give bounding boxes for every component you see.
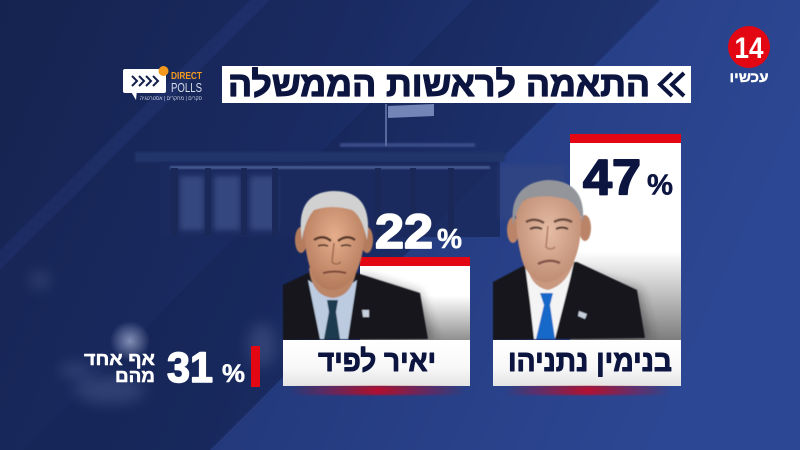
value: 22 percent: 22 (375, 206, 433, 259)
value: 47 percent: 47 (583, 150, 641, 206)
callout: either of them 31 percent: מהם (115, 366, 155, 386)
city lights (30, 272, 276, 404)
logo: channel 14: 14 (734, 32, 764, 65)
logo: direct polls (123, 66, 202, 102)
portrait: lapid (283, 191, 435, 340)
logo: channel 14: עכשיו (730, 69, 768, 85)
panel: netanyahu (493, 134, 681, 395)
callout: either of them 31 percent: אף אחד (84, 349, 155, 369)
icon: chevrons (132, 76, 158, 86)
callout: either of them 31 percent: % (222, 360, 245, 388)
knesset building backdrop (135, 104, 565, 237)
logo: direct polls: DIRECT (171, 71, 202, 82)
value: 47 percent: % (647, 170, 673, 202)
value: 22 percent: % (437, 223, 462, 254)
logo: direct polls: סקרים | מחקרים | אסטרטגיה (140, 96, 202, 102)
callout: either of them 31 percent (84, 344, 260, 392)
portrait: netanyahu (493, 180, 652, 340)
panel: lapid (283, 191, 470, 395)
name label: יאיר לפיד (318, 345, 436, 378)
value: 47 percent (583, 150, 673, 206)
icon: double chevron (660, 73, 684, 96)
name label (283, 340, 470, 386)
logo: direct polls: POLLS (171, 80, 202, 95)
name label (493, 340, 681, 386)
callout: either of them 31 percent: 31 (167, 344, 213, 392)
title: התאמה לראשות הממשלה (228, 65, 650, 104)
value: 22 percent (375, 206, 462, 259)
name label: בנימין נתניהו (508, 345, 672, 378)
logo: channel 14 (728, 26, 770, 85)
